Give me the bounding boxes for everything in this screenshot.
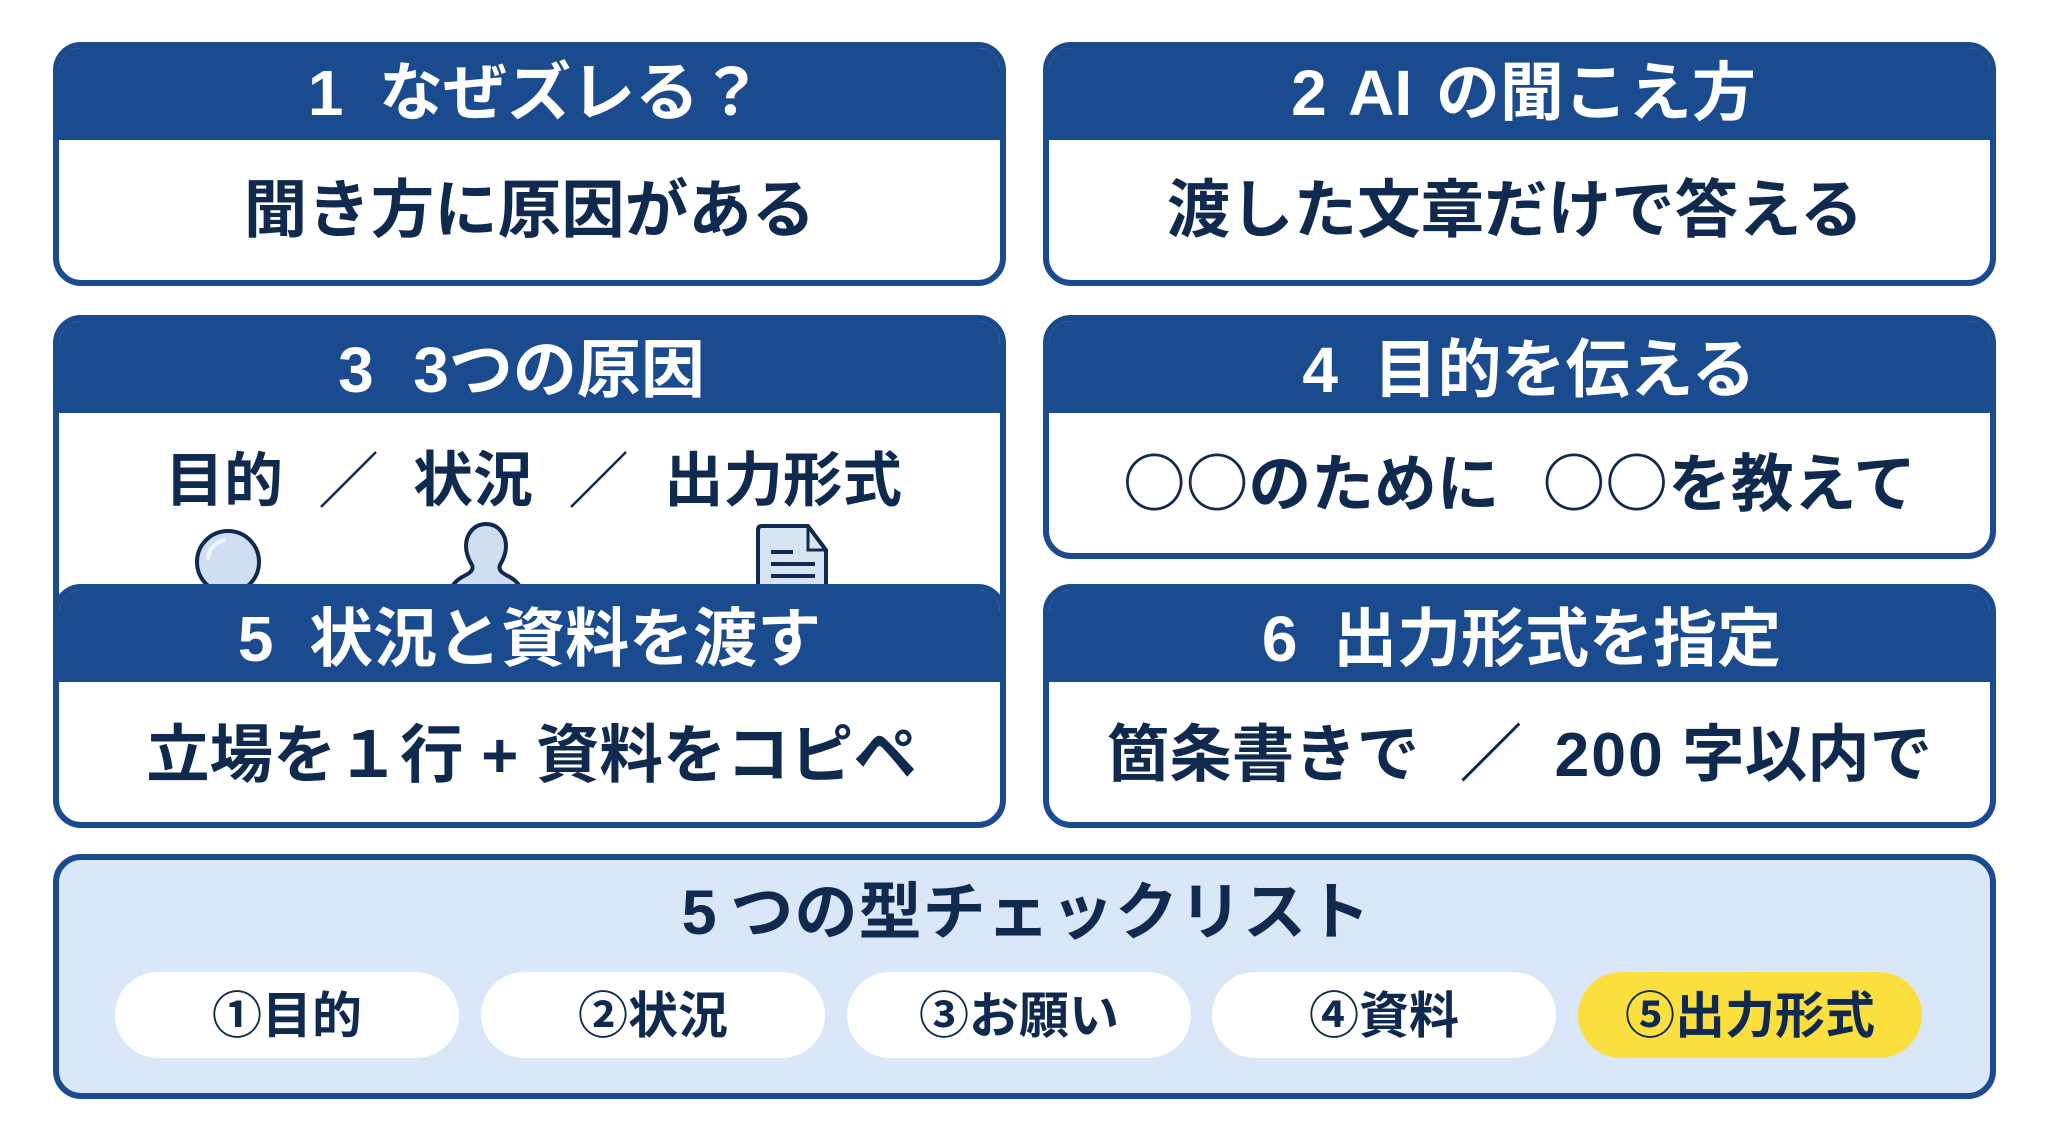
pill: お願い	[847, 972, 1191, 1058]
pill: 状況: ②状況	[578, 988, 728, 1044]
heading: panel 6: 6 出力形式を指定	[1262, 603, 1781, 675]
slash 2	[571, 452, 626, 507]
text: cause 状況: 状況	[413, 447, 533, 514]
heading: panel 2	[1043, 42, 1996, 140]
heading: panel 4	[1043, 315, 1996, 413]
pill: 目的: ①目的	[212, 988, 362, 1044]
panel: 3 three causes	[53, 315, 1006, 645]
panel: 6 specify output format	[1043, 584, 1996, 828]
panel: checklist	[53, 854, 1996, 1099]
heading: panel 4: 4 目的を伝える	[1302, 334, 1756, 406]
icon: document	[758, 526, 826, 600]
heading: checklist: 5 つの型チェックリスト	[682, 878, 1371, 948]
pill: 状況	[481, 972, 825, 1058]
heading: panel 6	[1043, 584, 1996, 682]
text: panel 2 body: 渡した文章だけで答える	[1167, 176, 1863, 246]
pill: 出力形式 highlighted	[1578, 972, 1922, 1058]
pill: 資料	[1212, 972, 1556, 1058]
heading: panel 3	[53, 315, 1006, 413]
slash 1	[321, 452, 376, 507]
text: panel 4 body: ○○のために ○○を教えて	[1123, 434, 1916, 525]
icon: magnifier lens	[197, 531, 259, 593]
text: panel 5 body: 立場を１行 + 資料をコピペ	[146, 721, 917, 791]
panel: 4 state the purpose	[1043, 315, 1996, 559]
heading: panel 1: 1 なぜズレる？	[308, 57, 763, 129]
heading: panel 5	[53, 584, 1006, 682]
heading: panel 5: 5 状況と資料を渡す	[238, 603, 821, 675]
pill: 出力形式 highlighted: ⑤出力形式	[1625, 988, 1875, 1044]
heading: panel 3: 3 3つの原因	[338, 334, 705, 406]
heading: panel 2: 2 AI の聞こえ方	[1291, 57, 1756, 129]
pill: 資料: ④資料	[1309, 988, 1459, 1044]
panel: 2 how AI hears	[1043, 42, 1996, 286]
panel: 1 why it drifts	[53, 42, 1006, 286]
pill: お願い: ③お願い	[919, 988, 1119, 1044]
text: panel 6 body: 箇条書きで ／ 200 字以内で	[1107, 720, 1932, 790]
text: cause 出力形式: 出力形式	[664, 447, 902, 514]
panel: 5 pass context and materials	[53, 584, 1006, 828]
icon: person	[449, 524, 523, 594]
text: cause 目的: 目的	[165, 448, 283, 514]
heading: panel 1	[53, 42, 1006, 140]
pill: 目的	[115, 972, 459, 1058]
text: panel 1 body: 聞き方に原因がある	[244, 176, 815, 246]
